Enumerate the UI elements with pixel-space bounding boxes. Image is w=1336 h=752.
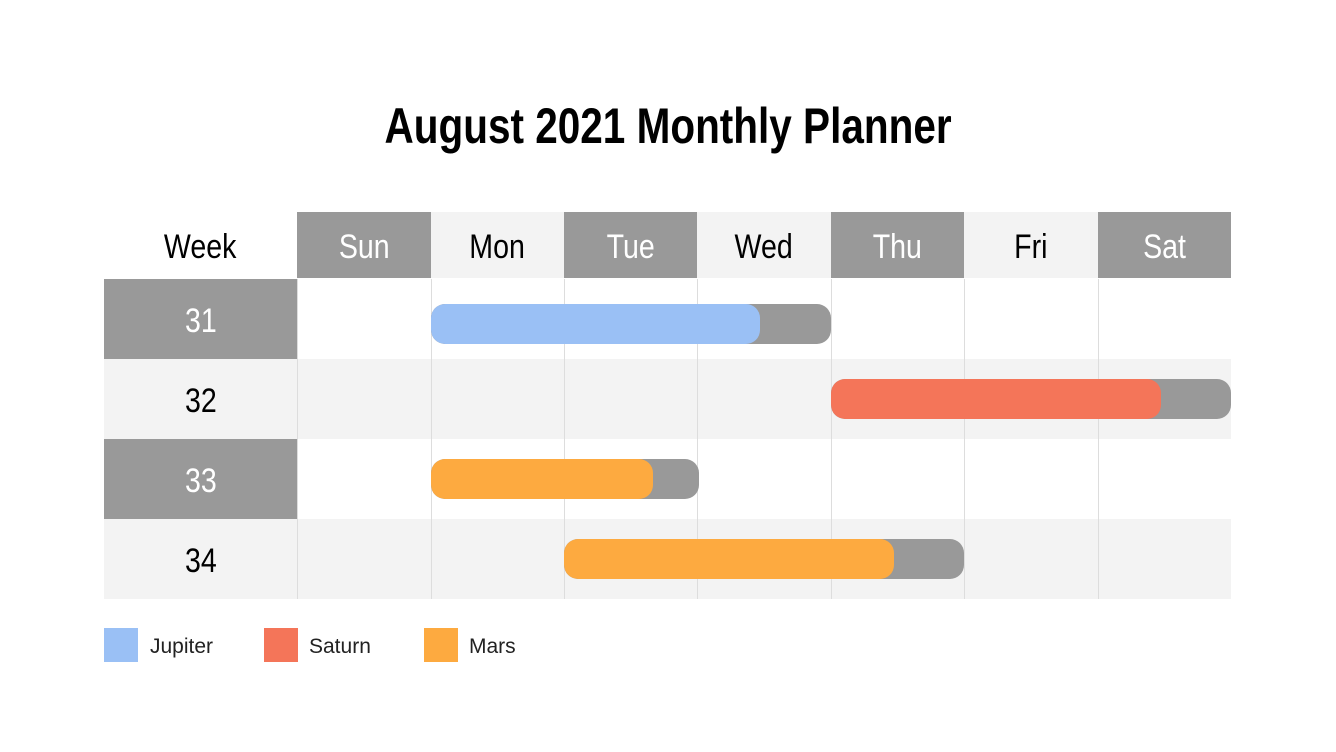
- week labels: [104, 279, 297, 580]
- header row: Thu: [873, 228, 922, 266]
- bar: Mars week 33: [431, 459, 699, 499]
- header row: Week: [164, 228, 237, 266]
- legend: Jupiter: [104, 628, 213, 662]
- week labels: 34: [185, 542, 216, 580]
- title: August 2021 Monthly Planner: [384, 98, 952, 154]
- header row: Fri: [1014, 228, 1048, 266]
- legend: Mars: Mars: [469, 635, 516, 658]
- header row: Mon: [470, 228, 525, 266]
- bar: Saturn week 32: [831, 379, 1231, 419]
- week labels: 32: [185, 382, 216, 420]
- legend: Saturn: Saturn: [309, 635, 371, 658]
- bar: Jupiter week 31: [431, 304, 831, 344]
- header row: [164, 212, 1231, 278]
- bar: Mars week 34: [564, 539, 964, 579]
- legend: Saturn: [264, 628, 371, 662]
- header row: Sat: [1143, 228, 1186, 266]
- week labels: 33: [185, 462, 216, 500]
- row backgrounds: [297, 279, 1231, 359]
- legend: Mars: [424, 628, 516, 662]
- header row: Tue: [606, 228, 655, 266]
- week labels: 31: [185, 302, 216, 340]
- legend: Jupiter: Jupiter: [150, 635, 213, 658]
- header row: Sun: [339, 228, 389, 266]
- legend: [104, 628, 516, 662]
- header row: Wed: [735, 228, 793, 266]
